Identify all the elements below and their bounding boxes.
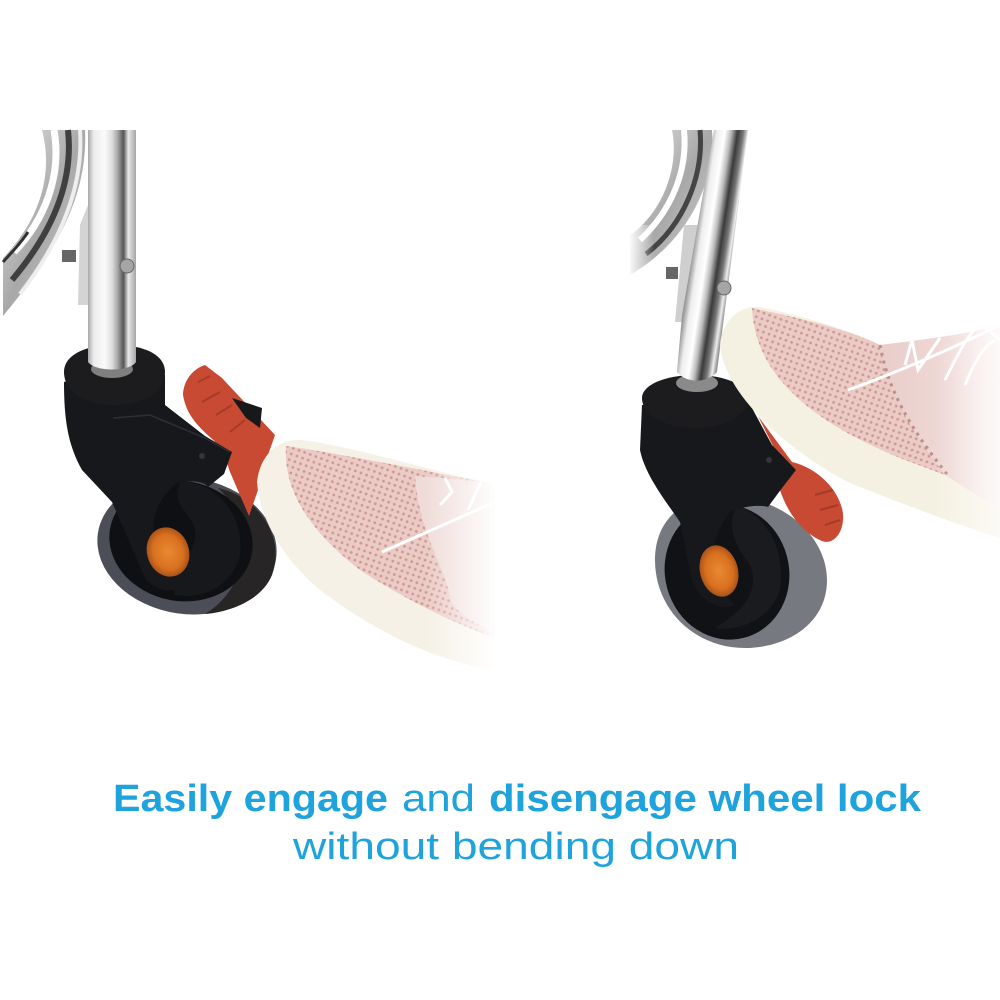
lever bracket: [232, 398, 262, 428]
swivel cap: [642, 375, 748, 428]
wheel: [88, 466, 286, 626]
caption line 1: Easily engage: [113, 778, 388, 820]
chrome pole: [677, 130, 748, 381]
pivot screw: [766, 457, 772, 463]
left shoe laces: [382, 478, 495, 552]
caption line 1: [113, 778, 922, 820]
illustration: right caster with shoe pressing the lever: [628, 130, 1000, 654]
orange reflector: [694, 541, 744, 601]
pole bolt: [120, 259, 134, 273]
red lever: [183, 365, 275, 516]
orange reflector: [140, 522, 196, 582]
caption: [113, 778, 922, 868]
caption line 1: disengage wheel lock: [489, 778, 922, 820]
illustration: left caster with shoe approaching the lever: [3, 130, 497, 675]
curved chrome frame tube: [3, 130, 85, 316]
swivel cap: [64, 345, 165, 405]
red lever: [758, 416, 843, 542]
nut: [676, 374, 718, 392]
black swivel housing: [640, 374, 796, 607]
nut: [91, 360, 133, 378]
right shoe: [720, 272, 1000, 545]
left shoe: [257, 435, 497, 675]
back bolt and sleeve: [666, 225, 700, 322]
right shoe laces: [848, 272, 1000, 390]
pole bolt: [717, 281, 731, 295]
wheel: [650, 490, 827, 654]
chrome pole: [88, 130, 136, 370]
pivot screw: [199, 453, 205, 459]
black swivel housing: [64, 345, 232, 590]
caption line 2: without bending down: [292, 826, 739, 868]
back bolt and sleeve: [62, 200, 90, 305]
caption line 1: and: [402, 778, 475, 820]
curved chrome frame tube: [628, 130, 712, 281]
